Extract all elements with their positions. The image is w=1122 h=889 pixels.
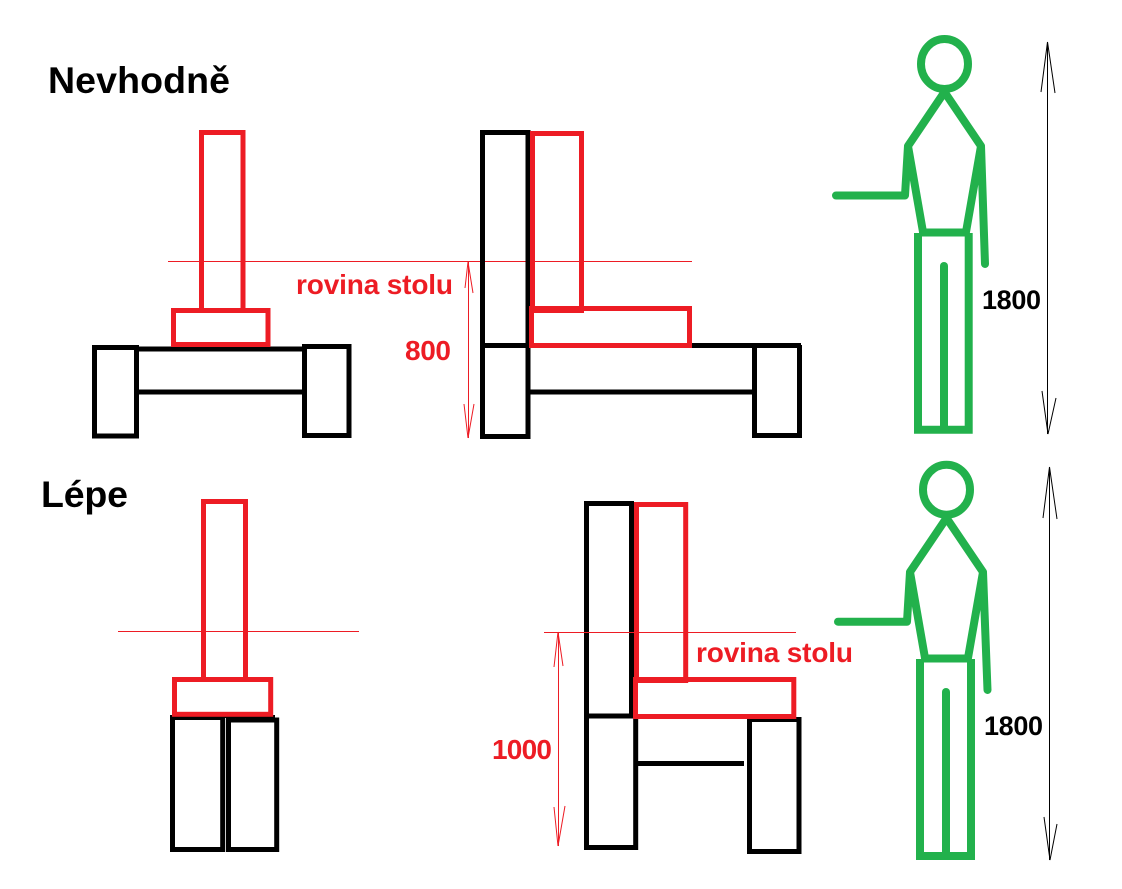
- dimension arrow 1800 top: [1041, 42, 1056, 434]
- heading: Nevhodně: Nevhodně: [48, 59, 230, 101]
- top middle side view: person seat: [532, 134, 690, 346]
- label: 800: 800: [405, 335, 451, 366]
- bottom figure: head: [923, 465, 970, 515]
- bottom middle table plane line: [544, 632, 796, 634]
- bottom left front view: bed frame: [172, 716, 277, 850]
- bottom left front view: person seat: [174, 502, 271, 714]
- bottom figure: waist: [921, 654, 971, 662]
- top figure: legs: [918, 233, 969, 430]
- bottom left table plane line: [118, 630, 359, 632]
- top left front view: person seat: [174, 132, 268, 344]
- label: 1800 bottom: 1800: [984, 711, 1043, 741]
- top left front view: bed frame: [94, 346, 349, 436]
- top table plane line: [168, 260, 692, 262]
- top middle side view: bed frame: [482, 132, 801, 436]
- bottom figure: arms and torso: [838, 518, 988, 690]
- label: 1000: 1000: [492, 734, 552, 765]
- label: rovina stolu bottom: rovina stolu: [696, 637, 853, 668]
- heading: Lépe: Lépe: [41, 473, 128, 515]
- bottom figure: legs: [920, 659, 971, 856]
- label: 1800 top: 1800: [982, 285, 1041, 315]
- top figure: arms and torso: [836, 92, 985, 264]
- top figure: leg divider: [940, 266, 948, 429]
- bottom figure: leg divider: [942, 692, 950, 855]
- bottom middle side view: bed frame: [584, 504, 799, 852]
- bottom figure: [838, 465, 988, 856]
- bottom middle side view: person seat: [636, 504, 794, 716]
- top figure: [836, 39, 985, 430]
- dimension arrow 800: [464, 262, 474, 438]
- top figure: head: [921, 39, 968, 89]
- top figure: waist: [919, 228, 969, 236]
- label: rovina stolu top: rovina stolu: [296, 269, 453, 300]
- dimension arrow 1000: [554, 632, 565, 846]
- dimension arrow 1800 bottom: [1043, 467, 1057, 860]
